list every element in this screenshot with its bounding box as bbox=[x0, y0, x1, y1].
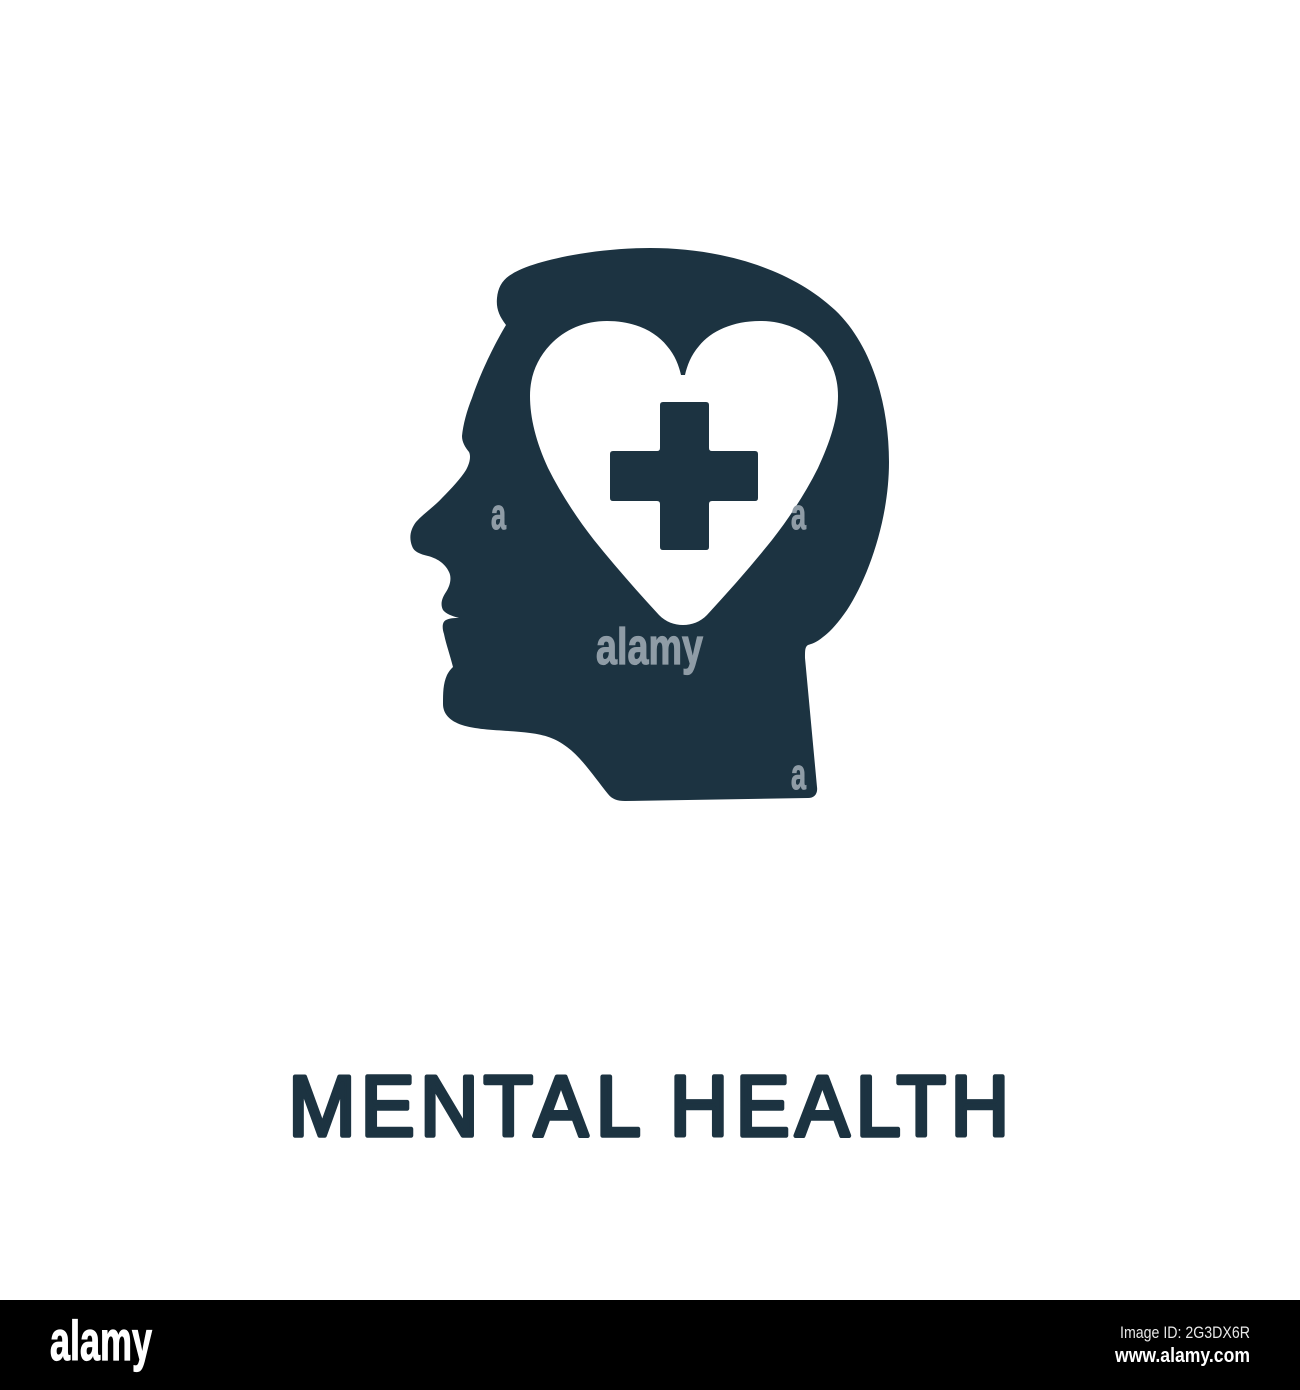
footer bar bbox=[0, 1300, 1300, 1390]
watermark: right letter a: a bbox=[791, 490, 806, 539]
watermark: center alamy logo: alamy bbox=[596, 618, 703, 675]
icon: head with heart and medical cross bbox=[410, 248, 889, 801]
head silhouette bbox=[410, 248, 889, 801]
watermark: left letter a: a bbox=[491, 490, 506, 539]
heart cutout bbox=[530, 321, 838, 625]
website: www.alamy.com bbox=[1114, 1345, 1250, 1367]
footer alamy logo: alamy bbox=[50, 1309, 152, 1372]
image id: Image ID: 2G3DX6R bbox=[1120, 1323, 1250, 1342]
title: MENTAL HEALTH bbox=[288, 1059, 1009, 1154]
medical cross bbox=[610, 402, 758, 550]
watermark: lower letter a: a bbox=[791, 750, 806, 799]
